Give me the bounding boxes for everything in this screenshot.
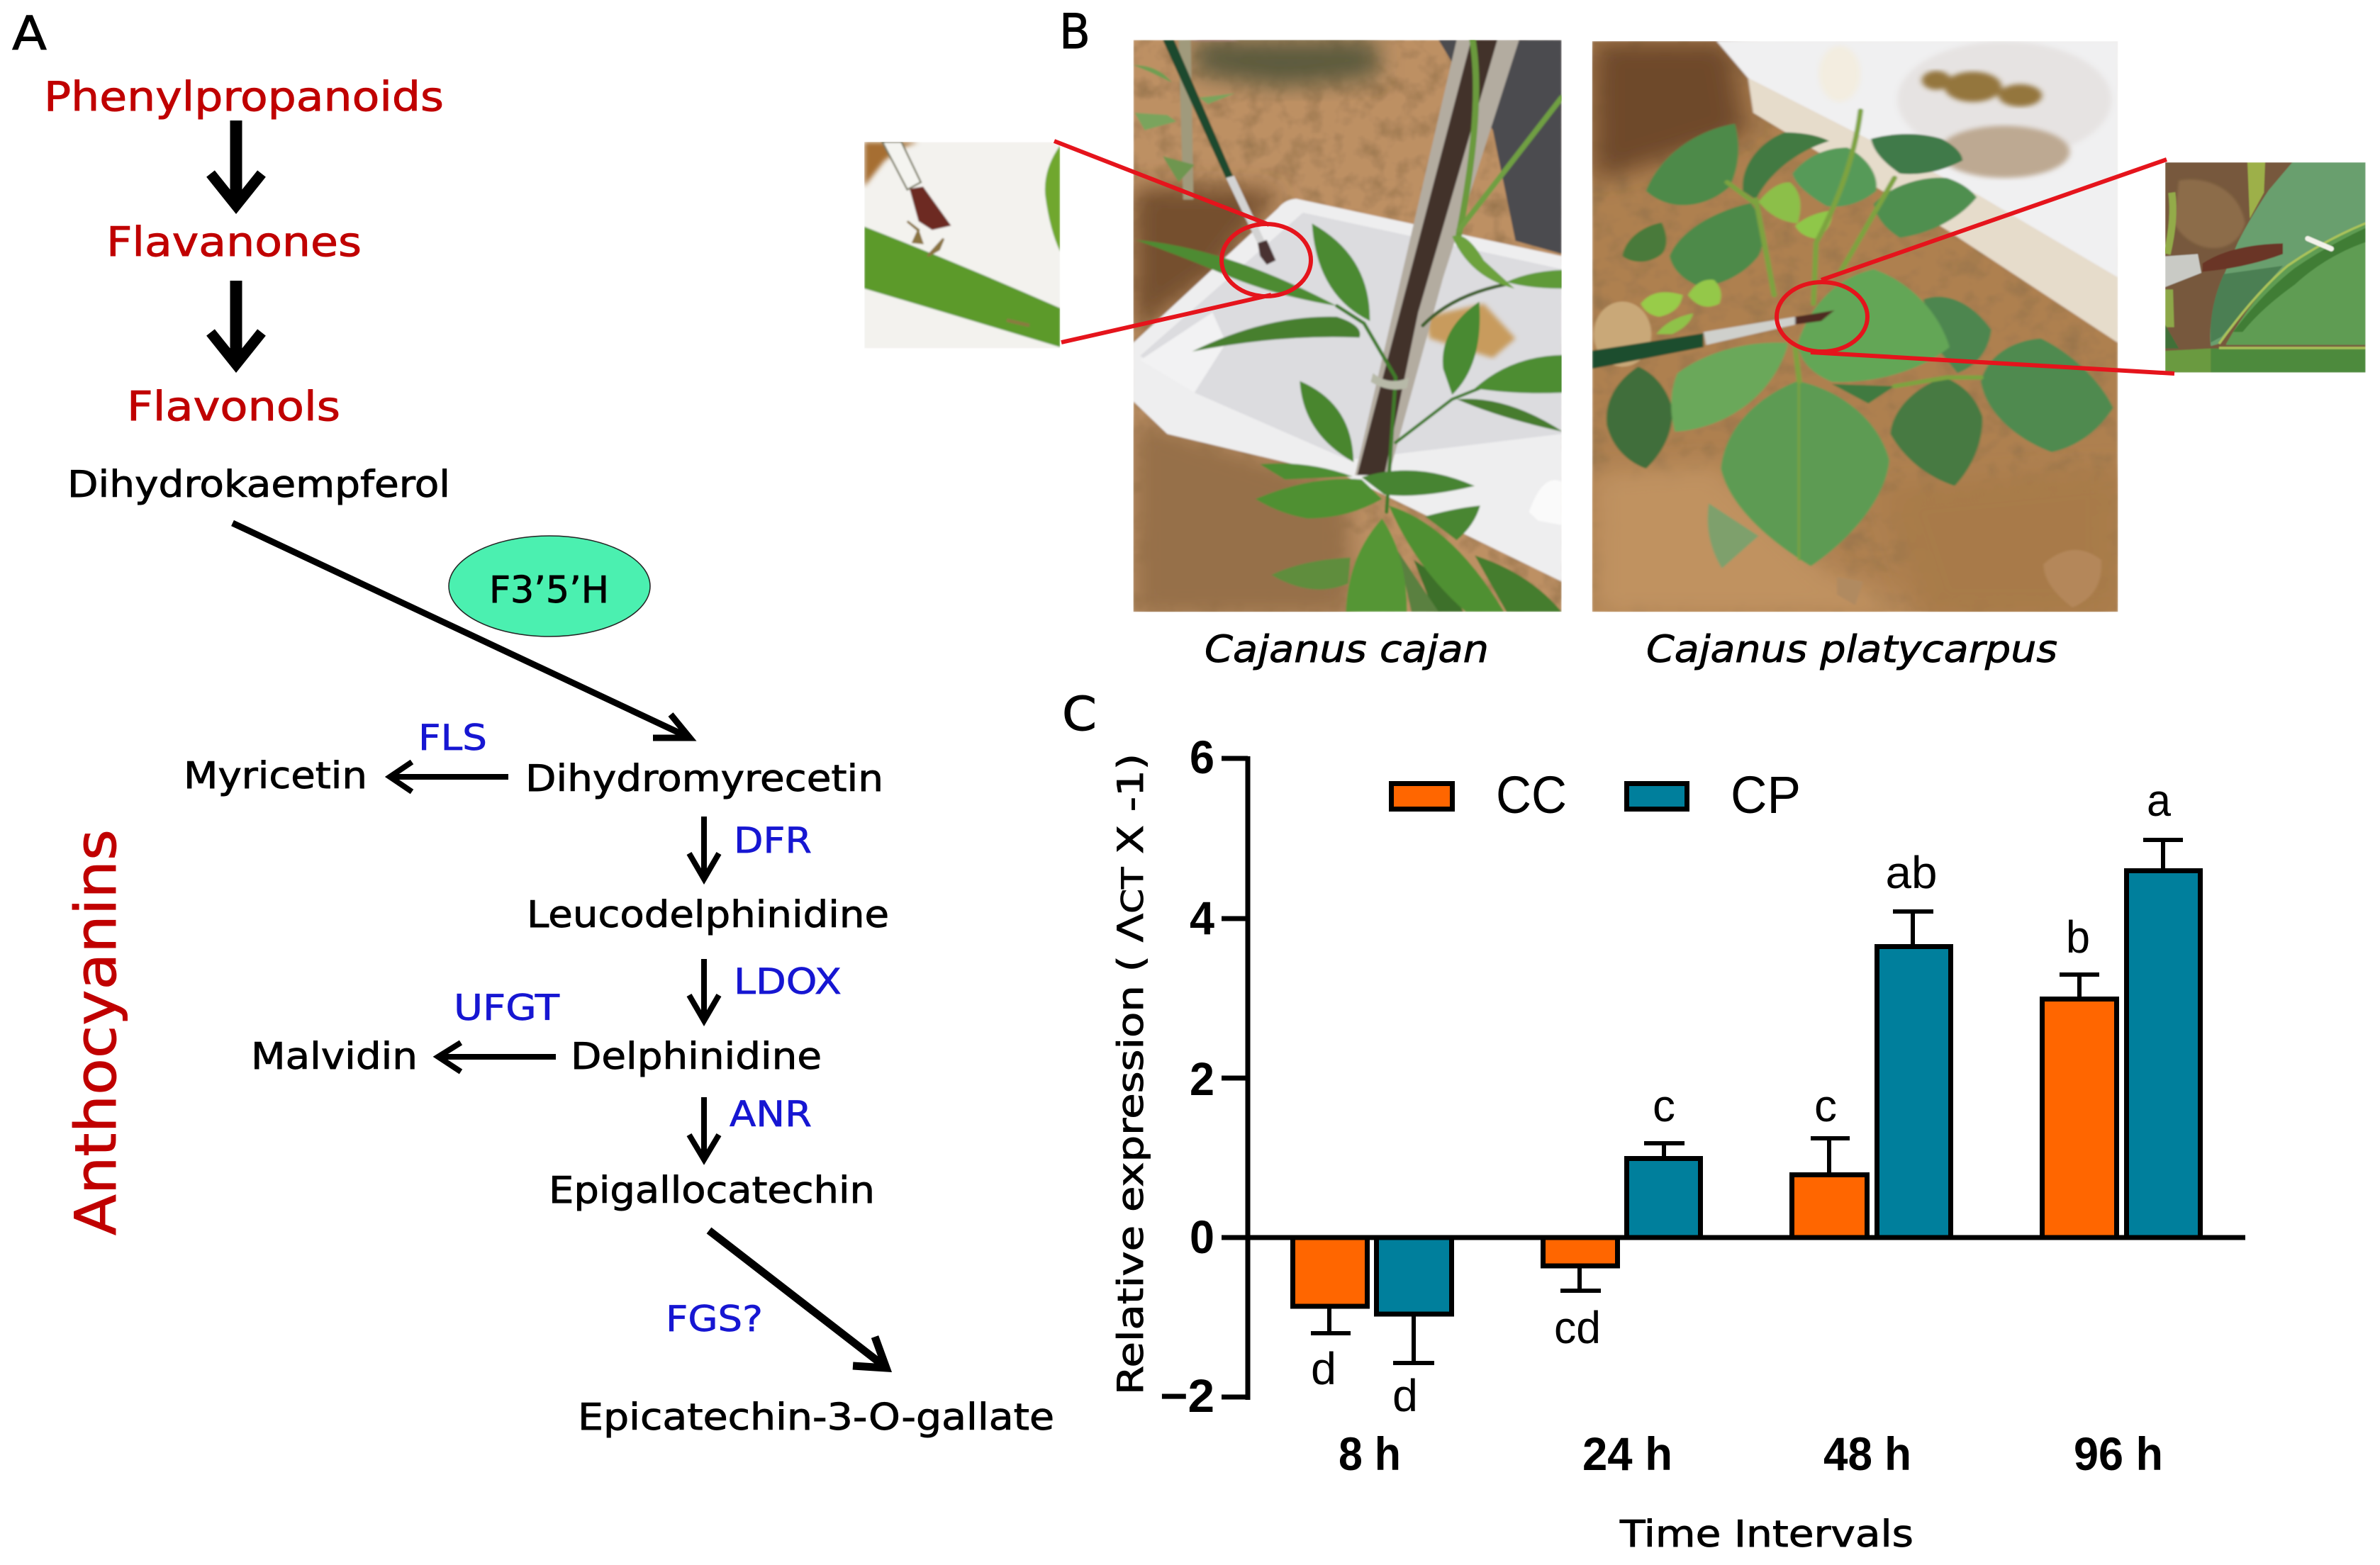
significance letters: a — [2147, 775, 2171, 826]
enzyme label: ANR: ANR — [730, 1094, 812, 1135]
x axis title: Time Intervals — [1619, 1513, 1914, 1556]
arrow: flavanones to flavonols — [211, 281, 262, 364]
arrow: delphinidine to epigallocatechin — [689, 1097, 719, 1160]
panel A: anthocyanin biosynthesis pathway — [12, 6, 1054, 1439]
panel label A: A — [12, 6, 47, 61]
compound: Delphinidine: Delphinidine — [571, 1036, 822, 1078]
compound: Myricetin: Myricetin — [184, 755, 367, 797]
heading: Flavanones: Flavanones — [106, 219, 362, 266]
x axis time labels: 24 h — [1582, 1427, 1672, 1480]
photo: Cajanus platycarpus plant on soil with tray and seed dish — [1592, 41, 2118, 616]
significance letters — [1311, 775, 2171, 1421]
y axis tick labels: 6 — [1190, 731, 1214, 783]
enzyme ellipse: F3'5'H — [449, 536, 650, 636]
y axis tick labels: 4 — [1190, 892, 1214, 944]
x axis zero line — [1222, 1235, 2245, 1240]
compound: Epigallocatechin: Epigallocatechin — [549, 1169, 875, 1212]
arrow: phenylpropanoids to flavanones — [211, 120, 262, 206]
legend — [1391, 765, 1801, 824]
y axis title: Relative expression ( ΛCT X -1) — [1110, 753, 1151, 1395]
significance letters: cd — [1554, 1302, 1601, 1353]
x axis time labels — [1339, 1427, 2163, 1480]
compound: Dihydrokaempferol: Dihydrokaempferol — [67, 464, 450, 506]
caption: Cajanus cajan: Cajanus cajan — [1205, 628, 1489, 671]
heading: Flavonols: Flavonols — [127, 383, 340, 430]
legend: CP — [1731, 765, 1801, 824]
significance letters: d — [1392, 1370, 1418, 1421]
enzyme label: FGS?: FGS? — [666, 1298, 763, 1340]
photo: Cajanus cajan plant on soil with white tray — [1134, 38, 1563, 616]
panel label C: C — [1062, 687, 1097, 741]
arrow: dihydrokaempferol to dihydromyrecetin — [233, 523, 690, 738]
arrow: epigallocatechin to epicatechin-3-O-gallate — [709, 1230, 886, 1368]
compound: Epicatechin-3-O-gallate: Epicatechin-3-O-gallate — [578, 1396, 1054, 1439]
enzyme label: UFGT: UFGT — [454, 987, 559, 1028]
arrow: dihydromyrecetin to leucodelphinidine — [689, 817, 719, 879]
arrow: delphinidine to malvidin — [438, 1043, 556, 1072]
y axis tick labels: 0 — [1190, 1211, 1214, 1263]
y axis tick labels — [1160, 731, 1214, 1422]
panel C: relative expression bar chart — [1062, 687, 2245, 1556]
significance letters: c — [1814, 1080, 1837, 1131]
compound: Leucodelphinidine: Leucodelphinidine — [527, 894, 889, 936]
error bars — [1311, 840, 2183, 1363]
enzyme label: LDOX: LDOX — [734, 961, 842, 1002]
inset: Cajanus cajan leaf close-up — [864, 142, 1060, 349]
enzyme ellipse: F3'5'H: F3’5’H — [489, 569, 609, 612]
significance letters: d — [1311, 1343, 1336, 1394]
heading: Phenylpropanoids: Phenylpropanoids — [44, 74, 444, 120]
callout lines and circle: Cajanus platycarpus — [1777, 159, 2174, 374]
callout lines and circle: Cajanus cajan — [1054, 141, 1311, 342]
panel label B: B — [1059, 4, 1090, 60]
y axis tick labels: 2 — [1190, 1053, 1214, 1105]
vertical heading: Anthocyanins: Anthocyanins — [63, 829, 129, 1235]
panel B: plant photographs with insets — [864, 4, 2366, 671]
significance letters: c — [1653, 1080, 1675, 1131]
inset: Cajanus platycarpus leaf close-up — [2165, 162, 2366, 373]
x axis time labels: 8 h — [1339, 1427, 1401, 1480]
arrow: leucodelphinidine to delphinidine — [689, 959, 719, 1021]
significance letters: ab — [1886, 847, 1937, 898]
y axis tick labels: −2 — [1160, 1369, 1214, 1422]
significance letters: b — [2066, 911, 2090, 963]
compound: Malvidin: Malvidin — [251, 1036, 418, 1078]
y axis with ticks — [1222, 756, 1248, 1400]
x axis time labels: 96 h — [2074, 1427, 2163, 1480]
legend: CC — [1496, 765, 1567, 824]
bars CC and CP by time point — [1293, 870, 2201, 1314]
arrow: dihydromyrecetin to myricetin — [390, 762, 508, 792]
caption: Cajanus platycarpus: Cajanus platycarpus — [1646, 628, 2057, 671]
compound: Dihydromyrecetin: Dihydromyrecetin — [525, 758, 883, 800]
enzyme label: DFR: DFR — [734, 820, 812, 861]
x axis time labels: 48 h — [1823, 1427, 1911, 1480]
enzyme label: FLS: FLS — [418, 717, 487, 758]
